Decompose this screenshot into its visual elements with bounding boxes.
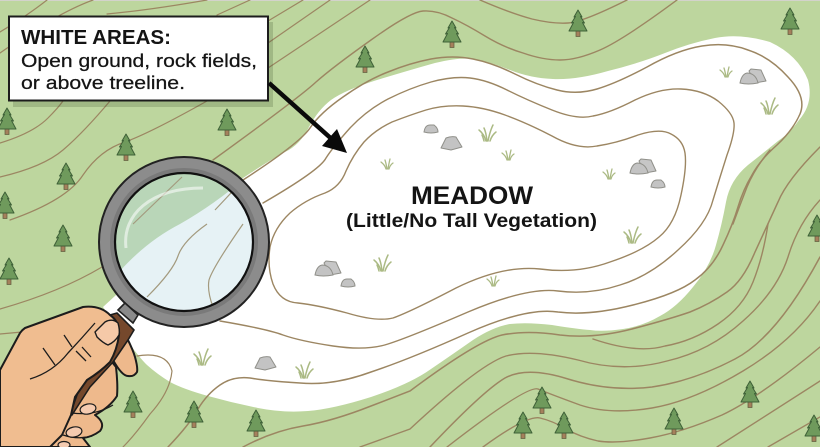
icon: tree (533, 387, 551, 414)
icon: tree (0, 192, 14, 218)
icon: tree (781, 8, 799, 34)
index finger (113, 338, 137, 376)
icon: tree (741, 381, 759, 408)
icon: grass (194, 349, 211, 365)
icon: rock (424, 125, 438, 133)
magnifying glass (99, 150, 269, 327)
icon: grass (479, 125, 496, 141)
meadow label: MEADOW (411, 182, 533, 210)
thumb nail (95, 320, 119, 345)
icon: grass (487, 276, 499, 286)
icon: grass (296, 362, 313, 378)
icon: rock (441, 137, 462, 150)
icon: tree (218, 109, 236, 136)
icon: grass (381, 159, 393, 169)
callout: white areas (9, 16, 273, 107)
icon: tree (0, 108, 16, 134)
callout: white areas: WHITE AREAS: (21, 27, 171, 49)
icon: tree (185, 401, 203, 428)
icon: grass (502, 150, 514, 160)
icon: tree (569, 10, 587, 36)
icon: tree (124, 391, 142, 418)
icon: tree (117, 134, 135, 160)
handle (71, 313, 134, 415)
icon: grass (374, 255, 391, 271)
icon: tree (514, 412, 532, 438)
callout: white areas: or above treeline. (21, 72, 185, 93)
icon: tree (443, 21, 461, 48)
meadow label: (Little/No Tall Vegetation) (346, 211, 597, 232)
icon: rocks (630, 159, 656, 174)
icon: tree (665, 408, 683, 434)
icon: grass (603, 169, 615, 179)
icon: tree (54, 225, 72, 252)
palm and thumb (0, 307, 119, 447)
icon: tree (57, 163, 75, 190)
icon: tree (356, 46, 374, 72)
icon: rock (341, 279, 355, 287)
icon: tree (0, 258, 18, 284)
white meadow area (103, 36, 810, 412)
icon: rock (651, 180, 665, 188)
arrow: callout to white area (269, 83, 347, 153)
meadow label (346, 182, 597, 232)
finger nails (79, 402, 97, 416)
callout: white areas: Open ground, rock fields, (21, 50, 257, 71)
icon: tree (247, 410, 265, 436)
icon: rock (255, 357, 276, 370)
icon: tree (555, 412, 573, 438)
shaft (118, 303, 138, 323)
icon: rocks (740, 69, 766, 84)
icon: grass (720, 67, 732, 77)
lens interior (116, 174, 252, 310)
icon: rocks (315, 261, 341, 276)
icon: tree (808, 215, 820, 242)
hand holding magnifier (0, 307, 137, 447)
icon: grass (624, 227, 641, 243)
lower fingers (40, 362, 117, 447)
knuckle creases (30, 323, 113, 438)
ring (107, 165, 261, 319)
icon: grass (761, 98, 778, 114)
icon: tree (805, 415, 820, 442)
